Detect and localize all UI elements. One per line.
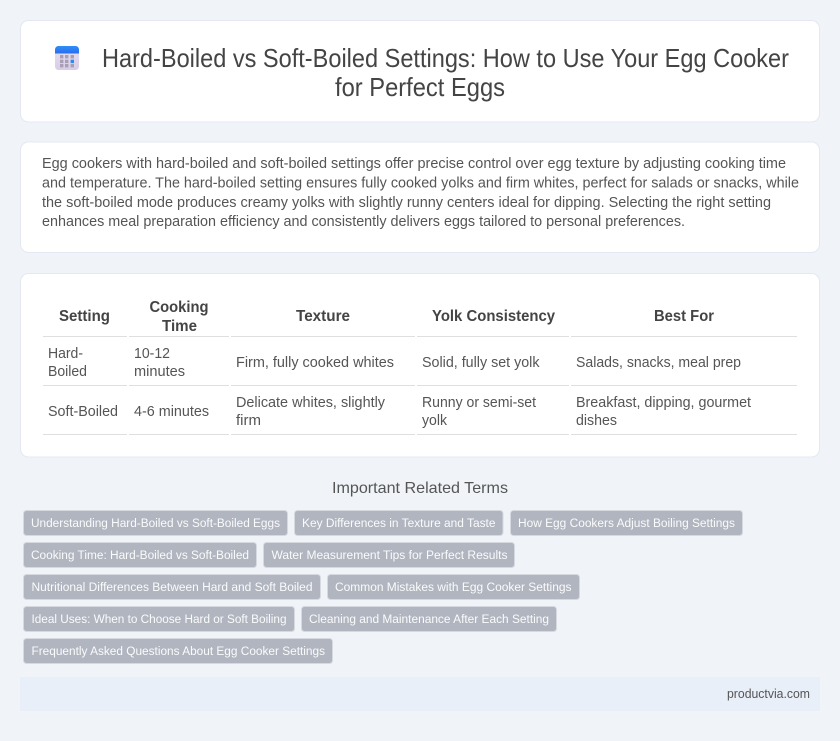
panel: related term chips: Understanding Hard-Boiled vs Soft-Boiled Eggs bbox=[31, 516, 280, 530]
panel: introduction text: the soft-boiled mode produces creamy yolks with slightly runny centers ideal for dipping. Selecting the right setting bbox=[42, 195, 771, 211]
table row: soft-boiled: dishes bbox=[576, 413, 617, 429]
table header row: Texture bbox=[296, 308, 350, 325]
panel: comparison table bbox=[20, 274, 820, 457]
panel: related term chips: Frequently Asked Questions About Egg Cooker Settings bbox=[32, 644, 325, 658]
table row: soft-boiled: yolk bbox=[422, 413, 448, 429]
panel: related term chips: Ideal Uses: When to Choose Hard or Soft Boiling bbox=[32, 612, 287, 626]
panel: related term chips: Nutritional Differences Between Hard and Soft Boiled bbox=[32, 580, 313, 594]
panel: header bbox=[20, 20, 820, 122]
table header row: Setting bbox=[59, 308, 110, 325]
table row: soft-boiled: firm bbox=[236, 413, 261, 429]
title: for Perfect Eggs bbox=[335, 74, 505, 102]
table header row bbox=[59, 299, 714, 335]
panel: related term chips: How Egg Cookers Adjust Boiling Settings bbox=[518, 516, 735, 530]
title bbox=[102, 45, 789, 102]
table header row: Time bbox=[162, 318, 197, 335]
panel: introduction text: Egg cookers with hard-boiled and soft-boiled settings offer precise control over egg texture by adjusting cooking time bbox=[42, 156, 786, 172]
footer bbox=[20, 677, 820, 711]
heading: important related terms: Important Related Terms bbox=[332, 480, 508, 497]
table row: hard-boiled: 10-12 bbox=[134, 346, 170, 362]
panel: introduction text: enhances meal preparation efficiency and consistently delivers eggs tailored to personal preferences. bbox=[42, 214, 685, 230]
table header row: Yolk Consistency bbox=[432, 308, 555, 325]
table row: hard-boiled: Firm, fully cooked whites bbox=[236, 355, 394, 371]
panel: related term chips bbox=[24, 510, 742, 664]
table row: hard-boiled: minutes bbox=[134, 364, 185, 380]
icon: calendar grid bbox=[55, 46, 79, 70]
table row: hard-boiled: Boiled bbox=[48, 364, 87, 380]
table header row: Cooking bbox=[150, 299, 208, 316]
table row: soft-boiled: Soft-Boiled bbox=[48, 404, 118, 420]
footer: productvia.com bbox=[727, 686, 810, 701]
table row: soft-boiled: 4-6 minutes bbox=[134, 404, 209, 420]
title: Hard-Boiled vs Soft-Boiled Settings: How to Use Your Egg Cooker bbox=[102, 45, 789, 73]
table row: soft-boiled bbox=[48, 395, 751, 429]
panel: introduction text bbox=[20, 142, 820, 252]
table row: hard-boiled: Solid, fully set yolk bbox=[422, 355, 540, 371]
panel: related term chips: Common Mistakes with Egg Cooker Settings bbox=[335, 580, 572, 594]
panel: related term chips: Water Measurement Tips for Perfect Results bbox=[272, 548, 508, 562]
panel: related term chips: Key Differences in Texture and Taste bbox=[302, 516, 496, 530]
table row: soft-boiled: Runny or semi-set bbox=[422, 395, 536, 411]
panel: related term chips: Cooking Time: Hard-Boiled vs Soft-Boiled bbox=[31, 548, 249, 562]
panel: introduction text: and temperature. The hard-boiled setting ensures fully cooked yolks and firm whites, perfect for salads or snacks, while bbox=[42, 176, 799, 192]
table row: soft-boiled: Breakfast, dipping, gourmet bbox=[576, 395, 751, 411]
panel: related term chips: Cleaning and Maintenance After Each Setting bbox=[309, 612, 549, 626]
table row: soft-boiled: Delicate whites, slightly bbox=[236, 395, 386, 411]
table row: hard-boiled: Hard- bbox=[48, 346, 83, 362]
table header row: Best For bbox=[654, 308, 714, 325]
table row: hard-boiled: Salads, snacks, meal prep bbox=[576, 355, 741, 371]
table row: hard-boiled bbox=[48, 346, 741, 380]
